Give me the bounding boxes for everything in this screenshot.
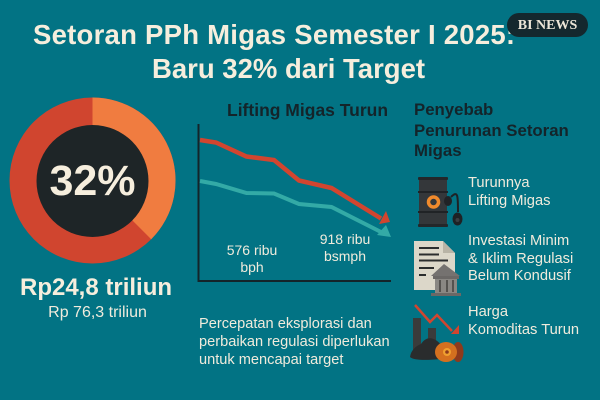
cause 2 text: Belum Kondusif [468,268,571,284]
causes heading: Penyebab [414,100,493,119]
title: Setoran PPh Migas Semester I 2025: [33,19,515,50]
cause 2 text: & Iklim Regulasi [468,250,573,266]
causes heading [414,100,569,160]
recommendation text [199,316,390,368]
cause 1 text: Lifting Migas [468,192,550,208]
label: 918 ribu bsmph [320,231,370,264]
label: 918 ribu bsmph: 918 ribu [320,231,370,247]
label: 918 ribu bsmph: bsmph [324,248,366,264]
donut chart: 32% [10,98,176,264]
realized amount: Rp24,8 triliun [20,274,172,301]
cause 2 text: Investasi Minim [468,233,569,249]
cause 3 text: Komoditas Turun [468,322,579,338]
label: 576 ribu bph: bph [240,259,264,275]
causes heading: Migas [414,141,462,160]
recommendation text: perbaikan regulasi diperlukan [199,334,390,350]
cause 1 text [468,175,550,208]
logo badge: BI News [507,13,588,37]
causes heading: Penurunan Setoran [414,121,569,140]
logo badge: BI News: BI NEWS [518,18,577,33]
cause 3 text [468,304,579,338]
label: 576 ribu bph [227,242,277,275]
cause 2 text [468,233,573,284]
recommendation text: untuk mencapai target [199,352,343,368]
cause 1 text: Turunnya [468,175,530,191]
chart heading: Lifting Migas Turun [227,100,388,120]
label: 576 ribu bph: 576 ribu [227,242,277,258]
target amount: Rp 76,3 triliun [48,304,147,321]
title: Baru 32% dari Target [152,53,425,84]
cause 3 text: Harga [468,304,508,320]
donut chart: 32%: 32% [49,157,136,205]
title [33,19,515,84]
recommendation text: Percepatan eksplorasi dan [199,316,372,332]
